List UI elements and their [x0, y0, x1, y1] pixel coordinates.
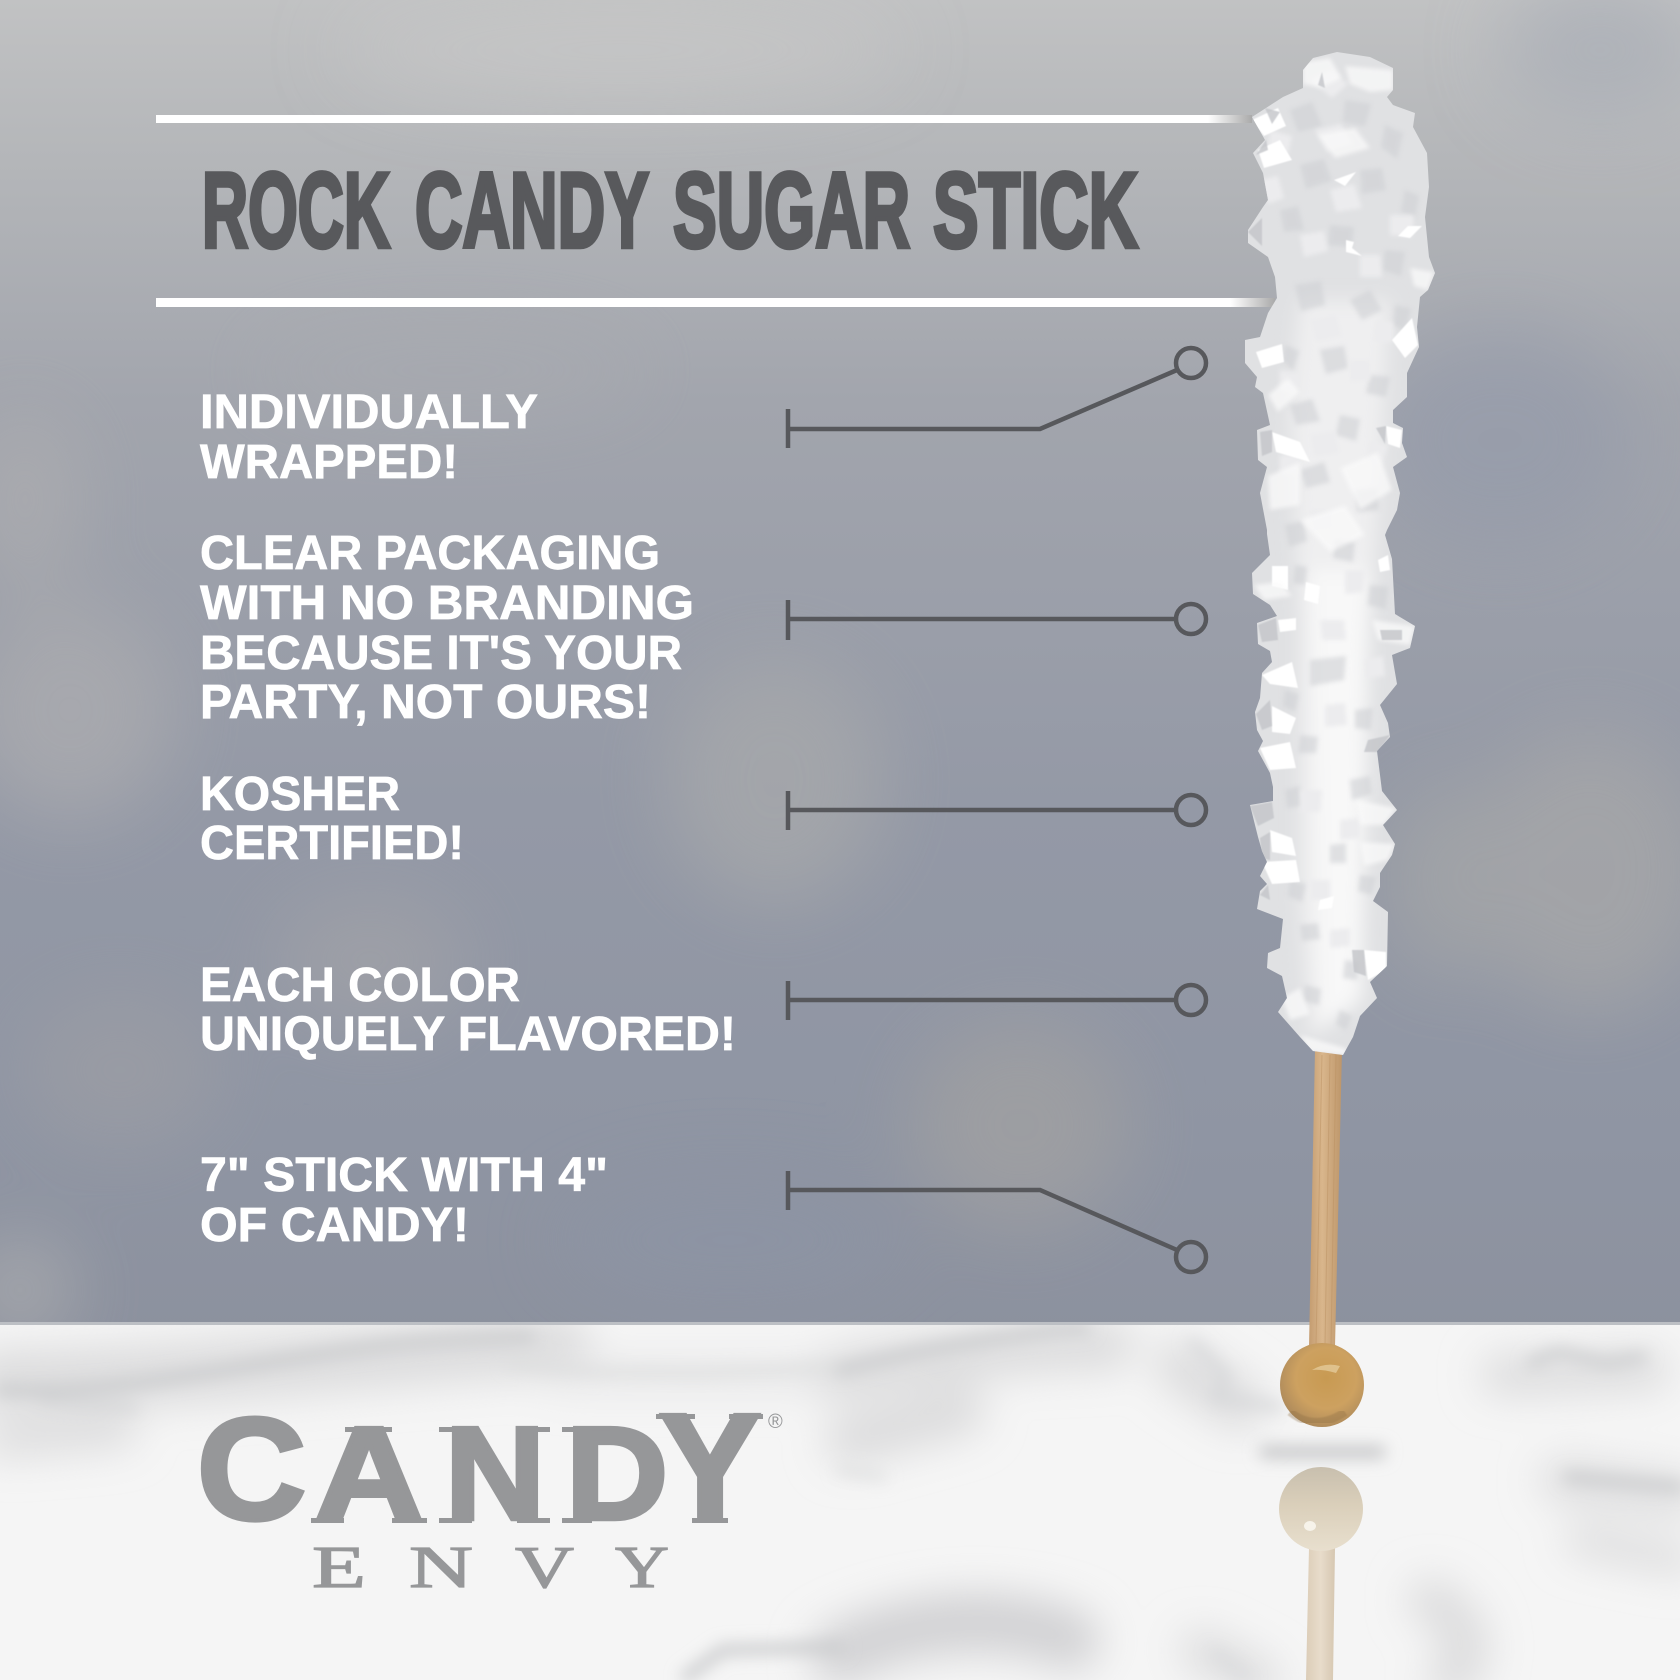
feature: individually wrapped: INDIVIDUALLY — [200, 386, 538, 439]
callout line 2 — [788, 600, 1206, 640]
title: SUGAR — [673, 150, 910, 270]
logo word: CANDY: N — [445, 1400, 545, 1547]
logo word: ENVY: Y — [615, 1534, 669, 1600]
rock candy crystals — [1245, 52, 1435, 1056]
logo registered mark: ® — [768, 1411, 783, 1433]
stick reflection — [1279, 1467, 1363, 1680]
logo word: CANDY — [197, 1382, 763, 1551]
feature: stick size — [200, 1149, 608, 1252]
callout line 1 — [788, 348, 1206, 448]
facet set: edge shadows — [1248, 72, 1402, 976]
title — [202, 150, 1138, 270]
blurred bokeh background — [0, 0, 1680, 1340]
feature: stick size: OF CANDY! — [200, 1199, 469, 1252]
logo word: CANDY: A — [315, 1400, 423, 1547]
callout line 3 — [788, 791, 1206, 830]
feature: clear packaging: PARTY, NOT OURS! — [200, 676, 651, 729]
logo word: ENVY: E — [312, 1534, 366, 1600]
facet set: soft shadows — [1280, 100, 1419, 1030]
feature: kosher certified: KOSHER — [200, 768, 400, 821]
callout line 5 — [788, 1171, 1206, 1272]
title: CANDY — [415, 150, 649, 270]
feature: uniquely flavored: UNIQUELY FLAVORED! — [200, 1008, 736, 1061]
facet set: light translucent crystals — [1254, 58, 1434, 1056]
feature: individually wrapped: WRAPPED! — [200, 436, 458, 489]
Candy Envy logo — [197, 1382, 783, 1600]
feature: clear packaging — [200, 527, 694, 729]
feature: uniquely flavored: EACH COLOR — [200, 959, 520, 1012]
logo word: CANDY: D — [566, 1400, 668, 1547]
title: STICK — [933, 150, 1138, 270]
logo word: ENVY: N — [409, 1534, 473, 1600]
bottom title rule — [156, 298, 1275, 307]
wooden ball — [1280, 1343, 1364, 1427]
feature: clear packaging: WITH NO BRANDING — [200, 577, 694, 630]
callout line 4 — [788, 981, 1206, 1020]
feature: stick size: 7" STICK WITH 4" — [200, 1149, 608, 1202]
logo word: CANDY: C — [197, 1388, 306, 1550]
feature: individually wrapped — [200, 386, 538, 489]
title: ROCK — [202, 150, 390, 270]
feature: kosher certified: CERTIFIED! — [200, 817, 464, 870]
feature: kosher certified — [200, 768, 464, 870]
marble surface — [0, 1322, 1680, 1680]
logo word: ENVY — [312, 1534, 669, 1600]
logo word: CANDY: Y — [660, 1382, 760, 1551]
logo word: ENVY: V — [515, 1534, 574, 1600]
feature: clear packaging: BECAUSE IT'S YOUR — [200, 627, 682, 680]
top title rule — [156, 115, 1252, 123]
feature: uniquely flavored — [200, 959, 736, 1061]
feature: clear packaging: CLEAR PACKAGING — [200, 527, 660, 580]
facet set: mid tones — [1260, 70, 1414, 948]
facet set: bright crystals — [1252, 108, 1422, 980]
wooden stick — [1309, 1050, 1342, 1347]
